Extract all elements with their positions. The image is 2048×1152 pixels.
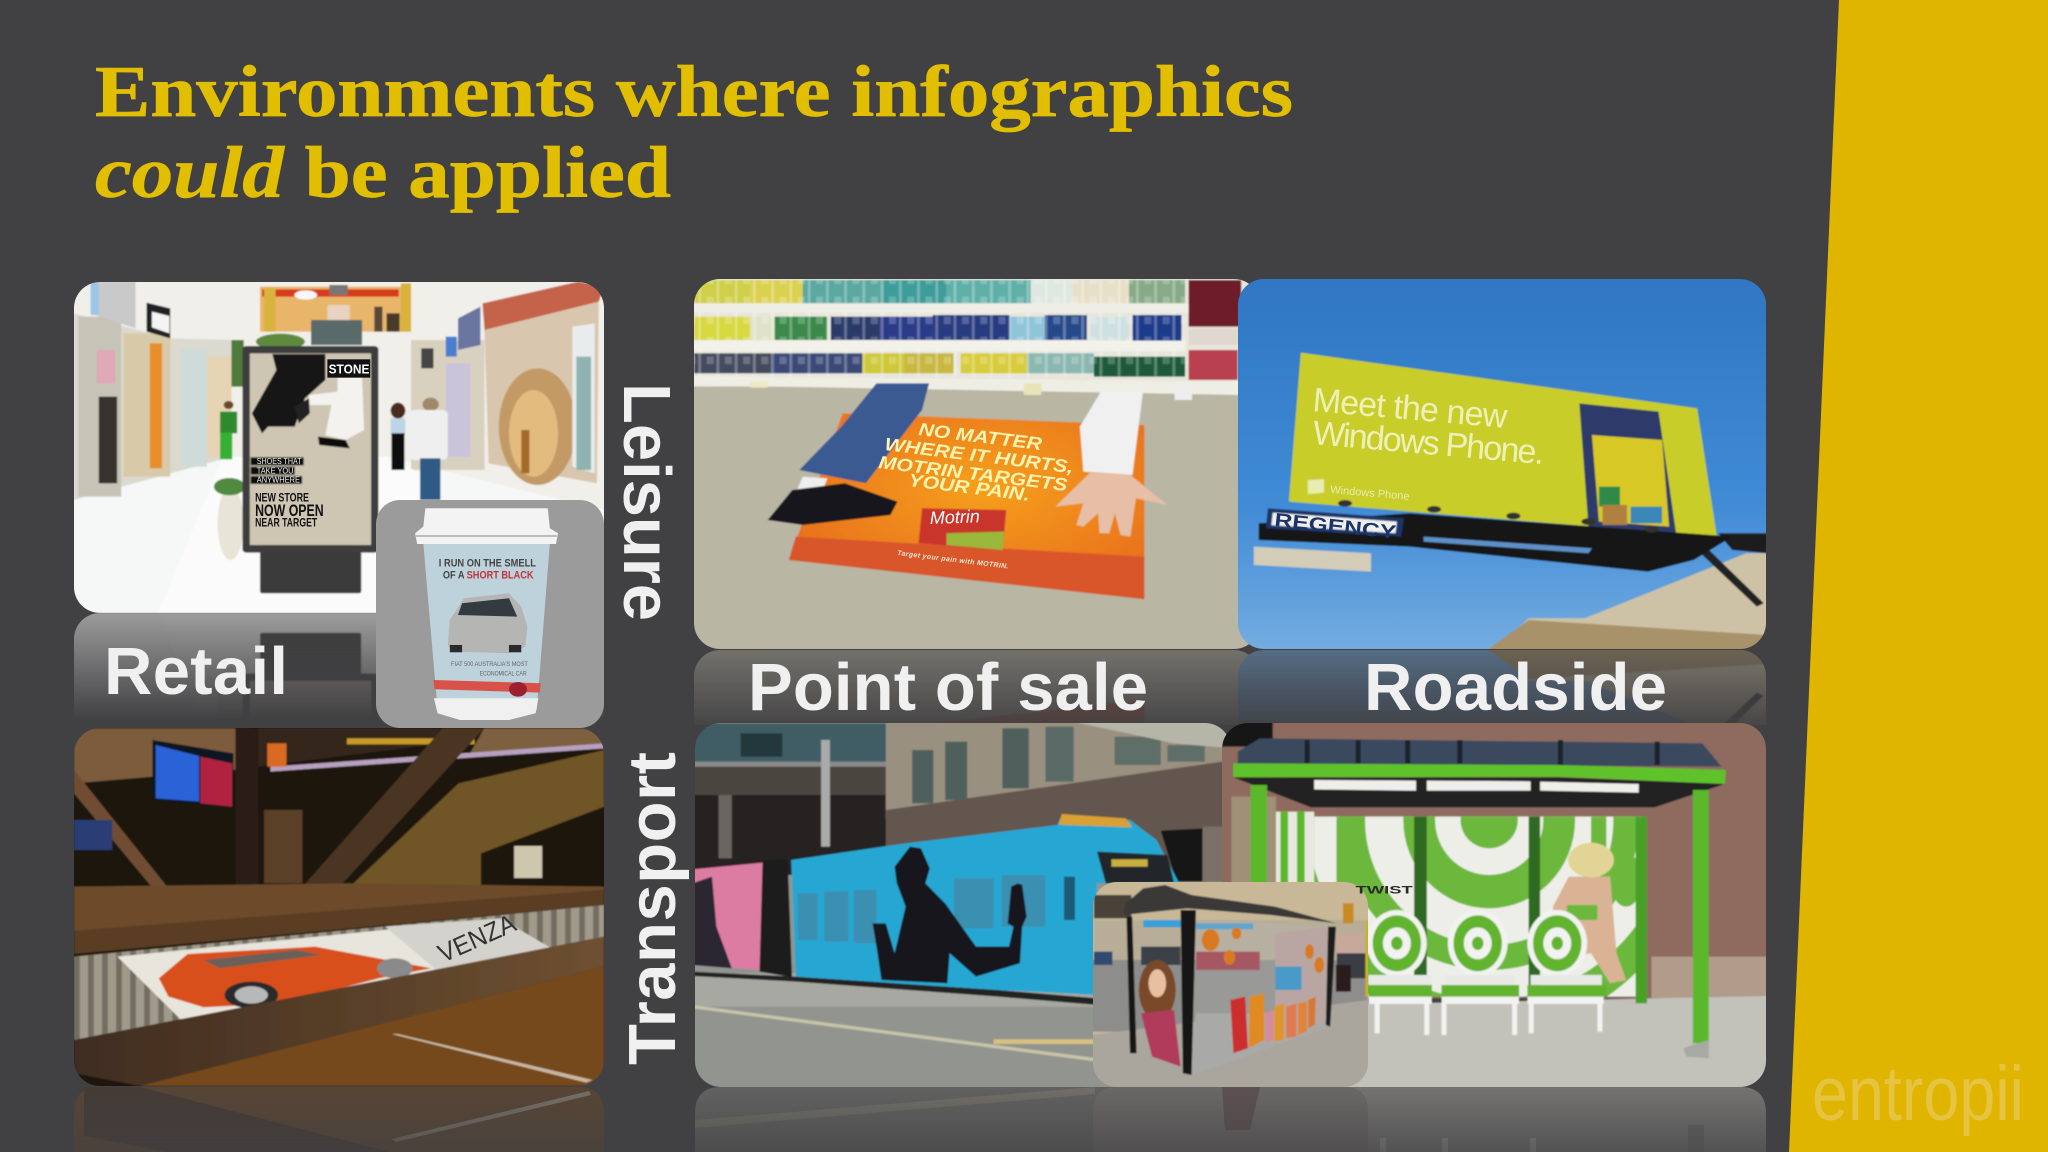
panel: point of sale sticker text: YOUR PAIN.: [908, 470, 1031, 505]
panel: retail poster text: NEW STORE: [255, 491, 309, 504]
panel: roadside billboard text: [1273, 381, 1546, 544]
panel: retail poster text: ANYWHERE: [257, 475, 300, 484]
label: Transport (vertical): Transport: [615, 752, 690, 1065]
panel: baggage carousel advert text: VENZA: [433, 907, 521, 968]
panel: point of sale sticker text: [878, 419, 1075, 571]
panel: roadside billboard text: REGENCY: [1273, 510, 1397, 544]
reflection: retail photo: [74, 613, 376, 710]
panel: point of sale floor sticker photo: [691, 277, 1266, 650]
yellow side band: [1789, 0, 2048, 1152]
panel: point of sale sticker text: Motrin: [929, 506, 980, 528]
panel: retail poster text: NOW OPEN: [255, 501, 324, 520]
title: [95, 51, 1293, 213]
panel: roadside billboard text: Windows Phone.: [1311, 414, 1546, 472]
panel: roadside billboard photo: [1234, 277, 1771, 650]
title: could be applied: [95, 132, 671, 213]
panel: coffee cup advert: OF A SHORT BLACK: [443, 569, 534, 581]
panel: retail poster text: [255, 359, 370, 529]
label: Retail: Retail: [104, 634, 288, 709]
panel: point of sale sticker text: WHERE IT HURTS,: [884, 434, 1075, 477]
panel: coffee cup advert: ECONOMICAL CAR: [480, 671, 527, 677]
title: Environments where infographics: [95, 51, 1293, 132]
panel: small orange drink bus shelter photo: [1090, 880, 1372, 1088]
panel: roadside billboard text: Meet the new: [1311, 381, 1509, 436]
label: Roadside: Roadside: [1364, 650, 1667, 725]
panel: coffee cup advert: I RUN ON THE SMELL: [439, 557, 536, 569]
panel: point of sale sticker text: Target your pain with MOTRIN.: [897, 550, 1009, 571]
panel: green target bus shelter photo: [1222, 723, 1766, 1087]
label: Leisure (vertical): Leisure: [609, 383, 684, 621]
panel: baggage carousel photo: [70, 727, 609, 1088]
reflection: point of sale and roadside photos: [694, 650, 1766, 724]
panel: retail poster text: STONE: [329, 363, 369, 377]
panel: retail poster text: SHOES THAT: [257, 457, 302, 466]
panel: point of sale sticker text: MOTRIN TARGETS: [878, 452, 1069, 495]
panel: point of sale sticker text: NO MATTER: [918, 419, 1043, 454]
panel: retail mall photo with poster kiosk: [72, 280, 607, 613]
label: Point of sale: Point of sale: [748, 650, 1148, 725]
panel: retail poster text: TAKE YOU: [257, 466, 293, 475]
panel: retail poster text: NEAR TARGET: [255, 516, 318, 529]
panel: roadside billboard text: Windows Phone: [1330, 484, 1410, 503]
reflection: transport photos: [74, 1087, 1766, 1152]
panel: coffee cup advert: [376, 500, 604, 728]
panel: coffee cup advert: FIAT 500 AUSTRALIA'S MOST: [451, 661, 528, 668]
panel: wrapped tram photo: [692, 722, 1238, 1088]
panel: shelter advert caption: TWIST: [1356, 883, 1413, 896]
